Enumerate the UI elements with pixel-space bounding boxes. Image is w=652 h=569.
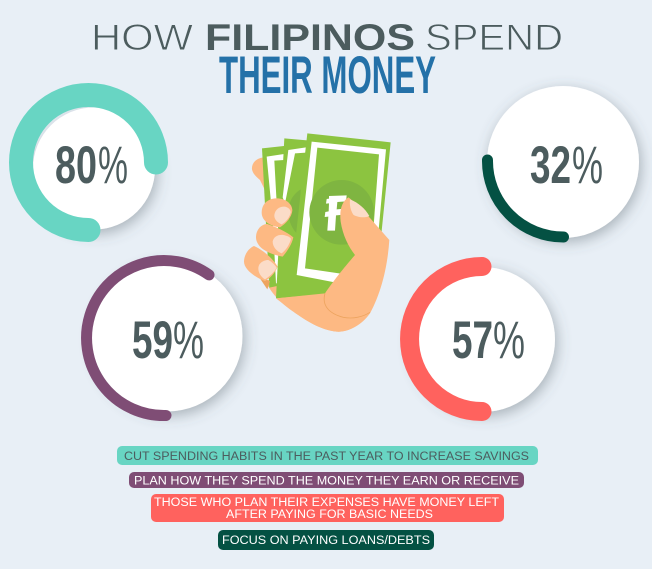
donut: 32%: 32 bbox=[530, 136, 571, 195]
donut: 80%: 80 bbox=[55, 136, 97, 195]
legend: dark green label bbox=[218, 530, 434, 550]
legend: purple label bbox=[129, 472, 524, 488]
donut: 59%: 59 bbox=[132, 311, 173, 370]
icon: thumb and palm bbox=[276, 197, 389, 332]
title: FILIPINOS bbox=[205, 17, 415, 58]
donut: 57% bbox=[410, 266, 555, 412]
legend: coral label: THOSE WHO PLAN THEIR EXPENSES HAVE MONEY LEFT bbox=[154, 497, 499, 509]
title bbox=[91, 17, 563, 105]
icon: middle bill bbox=[276, 138, 330, 298]
donut: 32%: % bbox=[572, 136, 603, 195]
icon: hand holding peso bills bbox=[244, 133, 391, 332]
icon: front bill bbox=[290, 133, 391, 293]
title: HOW bbox=[91, 17, 193, 58]
donut: 80% bbox=[21, 95, 156, 230]
icon: middle finger bbox=[256, 224, 293, 257]
donut: 57%: % bbox=[493, 311, 525, 370]
icon: left bill bbox=[262, 146, 302, 288]
legend: teal label bbox=[117, 446, 538, 465]
title: SPEND bbox=[425, 17, 563, 58]
legend: teal label: CUT SPENDING HABITS IN THE PAST YEAR TO INCREASE SAVINGS bbox=[124, 451, 529, 463]
donut: 57%: 57 bbox=[452, 311, 493, 370]
donut: 80%: % bbox=[98, 136, 128, 195]
icon: upper finger bbox=[262, 198, 292, 227]
donut: 59%: % bbox=[173, 311, 204, 370]
legend: purple label: PLAN HOW THEY SPEND THE MONEY THEY EARN OR RECEIVE bbox=[134, 476, 519, 488]
icon: palm and back finger behind bills bbox=[252, 157, 370, 332]
donut: 59% bbox=[87, 260, 242, 416]
donut: 32% bbox=[487, 86, 639, 238]
icon: lower finger bbox=[244, 246, 278, 289]
legend: coral label bbox=[151, 494, 504, 522]
title: THEIR MONEY bbox=[219, 46, 436, 105]
legend: coral label: AFTER PAYING FOR BASIC NEEDS bbox=[226, 509, 433, 521]
legend: dark green label: FOCUS ON PAYING LOANS/DEBTS bbox=[222, 535, 430, 547]
